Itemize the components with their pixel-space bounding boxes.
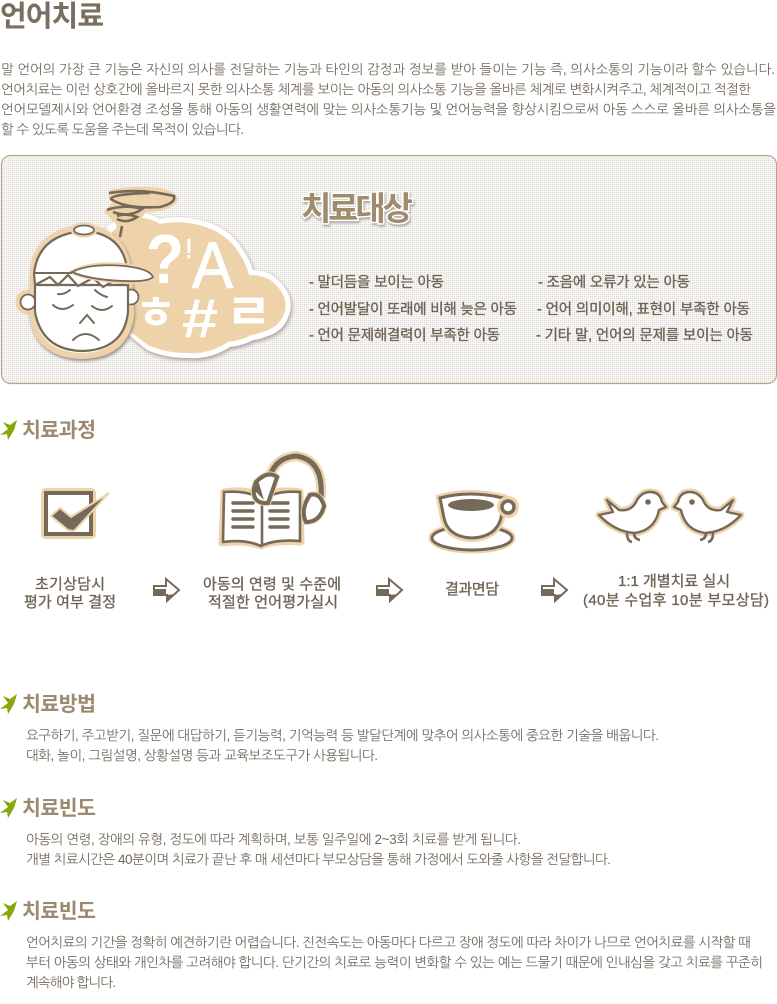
speech cloud: # [182,287,218,349]
icon: book and headphones [222,456,324,546]
heading: treatment targets: 치료대상 [301,190,413,227]
duration text [26,935,763,990]
left bird [599,492,666,542]
heading: process: 치료과정 [22,419,96,442]
section: duration [0,900,763,990]
step labels: 1:1 개별치료 실시 [618,573,730,590]
target list [309,274,753,344]
duration text: 부터 아동의 상태와 개인차를 고려해야 합니다. 단기간의 치료로 능력이 변화할 수 있는 예는 드물기 때문에 인내심을 갖고 치료를 꾸준히 [26,955,763,970]
speech cloud: A [192,228,233,302]
title: 언어치료 [0,0,104,33]
step labels: 아동의 연령 및 수준에 [203,576,341,593]
arrow 2 [376,579,402,601]
speech cloud: ? [146,220,184,298]
speech cloud [107,213,291,358]
speech cloud: ㄹ [226,273,272,345]
heading: frequency: 치료빈도 [22,797,96,820]
target list: - 언어 문제해결력이 부족한 아동 [309,327,500,344]
speech cloud: ! [185,233,193,264]
method text: 요구하기, 주고받기, 질문에 대답하기, 듣기능력, 기억능력 등 발달단계에 맞추어 의사소통에 중요한 기술을 배웁니다. [26,728,659,743]
method text: 대화, 놀이, 그림설명, 상황설명 등과 교육보조도구가 사용됩니다. [26,748,378,763]
heading: duration: 치료빈도 [22,900,96,923]
panel: treatment targets [2,156,776,384]
step labels [24,573,769,611]
speech cloud: ㅎ [135,277,176,342]
arrow 3 [541,579,567,601]
step labels: 적절한 언어평가실시 [208,594,338,611]
step labels: (40분 수업후 10분 부모상담) [583,592,769,609]
smoke swirl [104,187,178,238]
target list: - 말더듬을 보이는 아동 [309,274,444,291]
intro paragraph: 할 수 있도록 도움을 주는데 목적이 있습니다. [1,122,244,137]
child head [18,225,154,356]
intro paragraph: 말 언어의 가장 큰 기능은 자신의 의사를 전달하는 기능과 타인의 감정과 정보를 받아 들이는 기능 즉, 의사소통의 기능이라 할수 있습니다. [1,62,775,77]
duration text: 언어치료의 기간을 정확히 예견하기란 어렵습니다. 진전속도는 아동마다 다르고 장애 정도에 따라 차이가 나므로 언어치료를 시작할 때 [26,935,751,950]
step labels: 초기상담시 [35,576,105,593]
section: method [0,693,659,763]
step labels: 결과면담 [445,581,499,598]
right bird [674,492,741,542]
target list: - 기타 말, 언어의 문제를 보이는 아동 [536,327,753,344]
intro paragraph: 언어치료는 이런 상호간에 올바르지 못한 의사소통 체계를 보이는 아동의 의사소통 기능을 올바른 체계로 변화시켜주고, 체계적이고 적절한 [1,82,751,97]
icon: confused child with speech cloud [18,187,291,358]
intro paragraph: 언어모델제시와 언어환경 조성을 통해 아동의 생활연력에 맞는 의사소통기능 및 언어능력을 향상시킴으로써 아동 스스로 올바른 의사소통을 [1,102,776,117]
target list: - 언어 의미이해, 표현이 부족한 아동 [537,301,750,318]
icon: checkbox [44,491,109,536]
duration text: 계속해야 합니다. [26,975,116,990]
section: process [0,419,769,611]
target list: - 언어발달이 또래에 비해 늦은 아동 [309,301,517,318]
method text [26,728,659,763]
frequency text [26,832,611,867]
heading: method: 치료방법 [22,693,96,716]
section: frequency [0,797,611,867]
icon: coffee cup [432,494,516,550]
arrow 1 [153,579,179,601]
icon: two birds [599,492,741,542]
frequency text: 개별 치료시간은 40분이며 치료가 끝난 후 매 세션마다 부모상담을 통해 가정에서 도와줄 사항을 전달합니다. [26,852,611,867]
intro paragraph [1,62,776,137]
frequency text: 아동의 연령, 장애의 유형, 정도에 따라 계획하며, 보통 일주일에 2~3회 치료를 받게 됩니다. [26,832,521,847]
step labels: 평가 여부 결정 [24,594,116,611]
target list: - 조음에 오류가 있는 아동 [538,274,690,291]
